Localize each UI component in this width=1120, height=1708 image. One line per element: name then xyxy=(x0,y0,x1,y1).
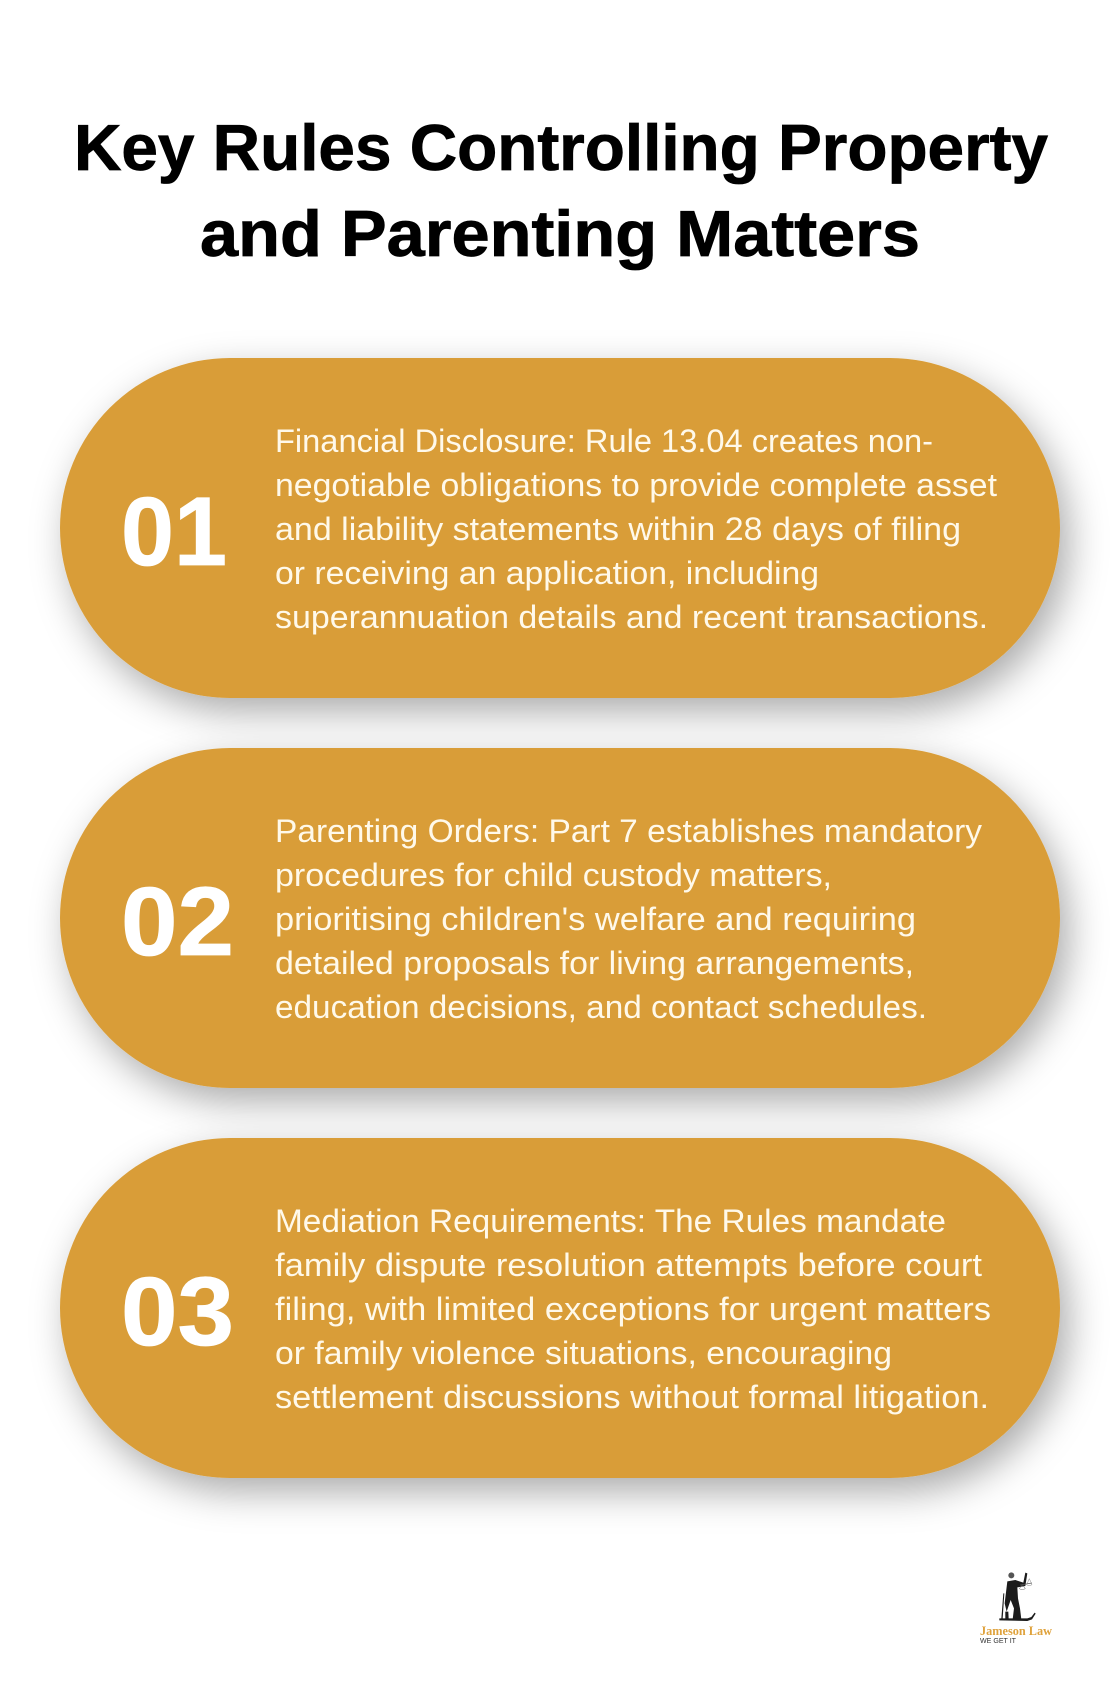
text block: mediation requirements: family dispute resolution attempts before court xyxy=(275,1247,982,1283)
pill background xyxy=(60,748,1060,1088)
text block: mediation requirements: or family violence situations, encouraging xyxy=(275,1335,892,1371)
text block: parenting orders: prioritising children's welfare and requiring xyxy=(275,901,916,937)
text block: parenting orders: procedures for child custody matters, xyxy=(275,857,832,893)
panel: 01 financial disclosure xyxy=(60,358,1060,698)
number 02: 02 xyxy=(121,867,234,976)
text block: parenting orders xyxy=(275,813,982,1025)
text block: financial disclosure: and liability statements within 28 days of filing xyxy=(275,511,961,547)
panel: 03 mediation requirements xyxy=(60,1138,1060,1478)
text block: financial disclosure xyxy=(275,423,997,635)
title xyxy=(74,111,1048,270)
text block: mediation requirements: filing, with limited exceptions for urgent matters xyxy=(275,1291,991,1327)
logo tagline: WE GET IT xyxy=(980,1636,1016,1645)
logo name: Jameson Law xyxy=(980,1623,1053,1638)
text block: mediation requirements xyxy=(275,1203,991,1415)
text block: financial disclosure: superannuation details and recent transactions. xyxy=(275,599,988,635)
text block: financial disclosure: Financial Disclosure: Rule 13.04 creates non- xyxy=(275,423,933,459)
title: and Parenting Matters xyxy=(200,197,920,270)
text block: financial disclosure: or receiving an application, including xyxy=(275,555,819,591)
panel: 02 parenting orders xyxy=(60,748,1060,1088)
text block: parenting orders: education decisions, and contact schedules. xyxy=(275,989,927,1025)
number 01: 01 xyxy=(121,477,227,586)
text block: financial disclosure: negotiable obligations to provide complete asset xyxy=(275,467,997,503)
pill background xyxy=(60,1138,1060,1478)
logo: Jameson Law xyxy=(980,1572,1053,1645)
text block: parenting orders: Parenting Orders: Part 7 establishes mandatory xyxy=(275,813,982,849)
number 03: 03 xyxy=(121,1257,234,1366)
title: Key Rules Controlling Property xyxy=(74,111,1048,184)
text block: parenting orders: detailed proposals for living arrangements, xyxy=(275,945,914,981)
text block: mediation requirements: Mediation Requirements: The Rules mandate xyxy=(275,1203,946,1239)
text block: mediation requirements: settlement discussions without formal litigation. xyxy=(275,1379,989,1415)
pill background xyxy=(60,358,1060,698)
icon: lady justice xyxy=(999,1572,1036,1621)
